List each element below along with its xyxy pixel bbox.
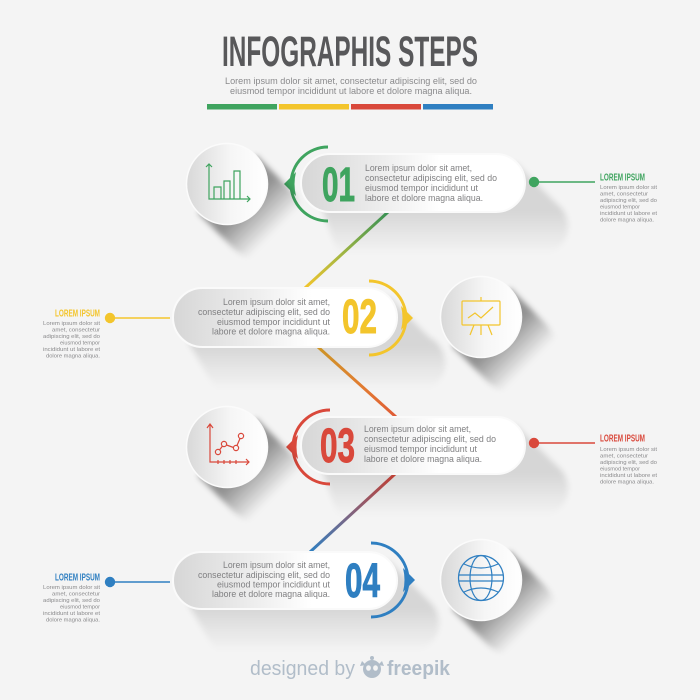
pill	[301, 417, 525, 474]
subtitle: eiusmod tempor incididunt ut labore et dolore magna aliqua.	[230, 86, 472, 97]
pill	[173, 552, 397, 609]
number: 02	[342, 291, 377, 344]
panel: step 2	[173, 276, 557, 393]
body text: eiusmod tempor incididunt ut	[365, 183, 478, 194]
callout: step 2: adipiscing elit, sed do	[43, 334, 100, 340]
callout: step 1: LOREM IPSUM	[600, 172, 645, 184]
callout: step 1: eiusmod tempor	[600, 204, 640, 210]
body text: labore et dolore magna aliqua.	[212, 589, 330, 600]
arc and pointer	[371, 543, 415, 617]
body text: consectetur adipiscing elit, sed do	[198, 307, 330, 318]
callout: step 3: eiusmod tempor	[600, 466, 640, 472]
callout: step 3: incididunt ut labore et	[600, 473, 658, 479]
panel: step 3	[186, 406, 568, 523]
circle	[186, 406, 268, 488]
body text: Lorem ipsum dolor sit amet,	[365, 163, 472, 174]
callout: step 4	[43, 572, 170, 624]
callout: step 3: Lorem ipsum dolor sit	[600, 447, 658, 453]
callout: step 4: adipiscing elit, sed do	[43, 598, 100, 604]
body text: consectetur adipiscing elit, sed do	[365, 173, 497, 184]
circle shadow	[452, 551, 557, 656]
callout: step 4: LOREM IPSUM	[55, 572, 100, 584]
footer credit: designed by	[250, 658, 355, 680]
callout: step 2: Lorem ipsum dolor sit	[43, 321, 101, 327]
body text	[365, 163, 497, 204]
callout: step 4: Lorem ipsum dolor sit	[43, 585, 101, 591]
icon: freepik mascot	[360, 656, 384, 678]
body text: labore et dolore magna aliqua.	[365, 193, 483, 204]
arc and pointer	[369, 281, 413, 355]
callout: step 1: amet, consectetur	[600, 192, 648, 198]
callout: step 2: dolore magna aliqua.	[46, 354, 100, 360]
footer credit	[250, 656, 451, 680]
subtitle	[225, 76, 477, 97]
title: INFOGRAPHIS STEPS	[222, 28, 478, 76]
body text: eiusmod tempor incididunt ut	[217, 317, 330, 328]
callout: step 1: adipiscing elit, sed do	[600, 198, 657, 204]
body text: consectetur adipiscing elit, sed do	[364, 434, 496, 445]
body text: labore et dolore magna aliqua.	[212, 326, 330, 338]
callout: step 3: LOREM IPSUM	[600, 434, 645, 444]
body text: Lorem ipsum dolor sit amet,	[223, 297, 330, 308]
callout: step 4: dolore magna aliqua.	[46, 618, 100, 624]
body text	[198, 560, 330, 600]
circle shadow	[452, 288, 557, 393]
circle shadow	[198, 155, 303, 260]
body text: eiusmod tempor incididunt ut	[364, 444, 477, 455]
pill shadow	[188, 297, 445, 392]
panel: step 4	[173, 540, 557, 656]
callout: step 3	[529, 434, 658, 486]
body text: consectetur adipiscing elit, sed do	[198, 570, 330, 581]
body text	[364, 424, 496, 465]
number: 01	[322, 159, 355, 212]
connector: step 2 to 3	[318, 347, 396, 417]
icon: bar chart	[206, 164, 250, 202]
pill	[301, 154, 525, 212]
callout: step 4: eiusmod tempor	[60, 604, 100, 610]
circle	[440, 540, 522, 620]
callout: step 1: incididunt ut labore et	[600, 211, 658, 217]
icon: globe	[458, 556, 504, 600]
subtitle: Lorem ipsum dolor sit amet, consectetur adipiscing elit, sed do	[225, 76, 477, 87]
callout: step 1	[529, 172, 658, 224]
circle shadow	[198, 418, 303, 523]
body text	[198, 297, 330, 338]
connector: step 1 to 2	[305, 212, 388, 288]
body text: Lorem ipsum dolor sit amet,	[223, 560, 330, 571]
body text: Lorem ipsum dolor sit amet,	[364, 424, 471, 435]
circle	[440, 276, 522, 358]
colour bars	[207, 104, 493, 110]
number: 03	[320, 420, 355, 473]
callout: step 2: LOREM IPSUM	[55, 308, 100, 320]
callout: step 2: amet, consectetur	[52, 328, 100, 334]
pill shadow	[322, 163, 568, 255]
callout: step 1: Lorem ipsum dolor sit	[600, 185, 658, 191]
icon: presentation board	[462, 297, 500, 335]
arc and pointer	[284, 147, 328, 221]
callout: step 3: dolore magna aliqua.	[600, 480, 654, 486]
pill	[173, 288, 397, 347]
panel: step 1	[186, 144, 568, 260]
callout: step 3: adipiscing elit, sed do	[600, 460, 657, 466]
pill shadow	[322, 425, 568, 517]
number: 04	[345, 555, 380, 608]
callout: step 2: incididunt ut labore et	[43, 347, 101, 353]
callout: step 4: incididunt ut labore et	[43, 611, 101, 617]
callout: step 1: dolore magna aliqua.	[600, 218, 654, 224]
callout: step 2: eiusmod tempor	[60, 340, 100, 346]
footer credit: freepik	[387, 658, 451, 680]
arc and pointer	[286, 410, 330, 484]
icon: line chart	[207, 424, 249, 465]
body text: labore et dolore magna aliqua.	[364, 454, 482, 465]
body text: eiusmod tempor incididunt ut	[217, 580, 330, 590]
circle	[186, 144, 268, 224]
callout: step 2	[43, 308, 170, 360]
callout: step 3: amet, consectetur	[600, 454, 648, 460]
pill shadow	[188, 561, 439, 652]
callout: step 4: amet, consectetur	[52, 592, 100, 598]
connector: step 3 to 4	[310, 474, 395, 552]
